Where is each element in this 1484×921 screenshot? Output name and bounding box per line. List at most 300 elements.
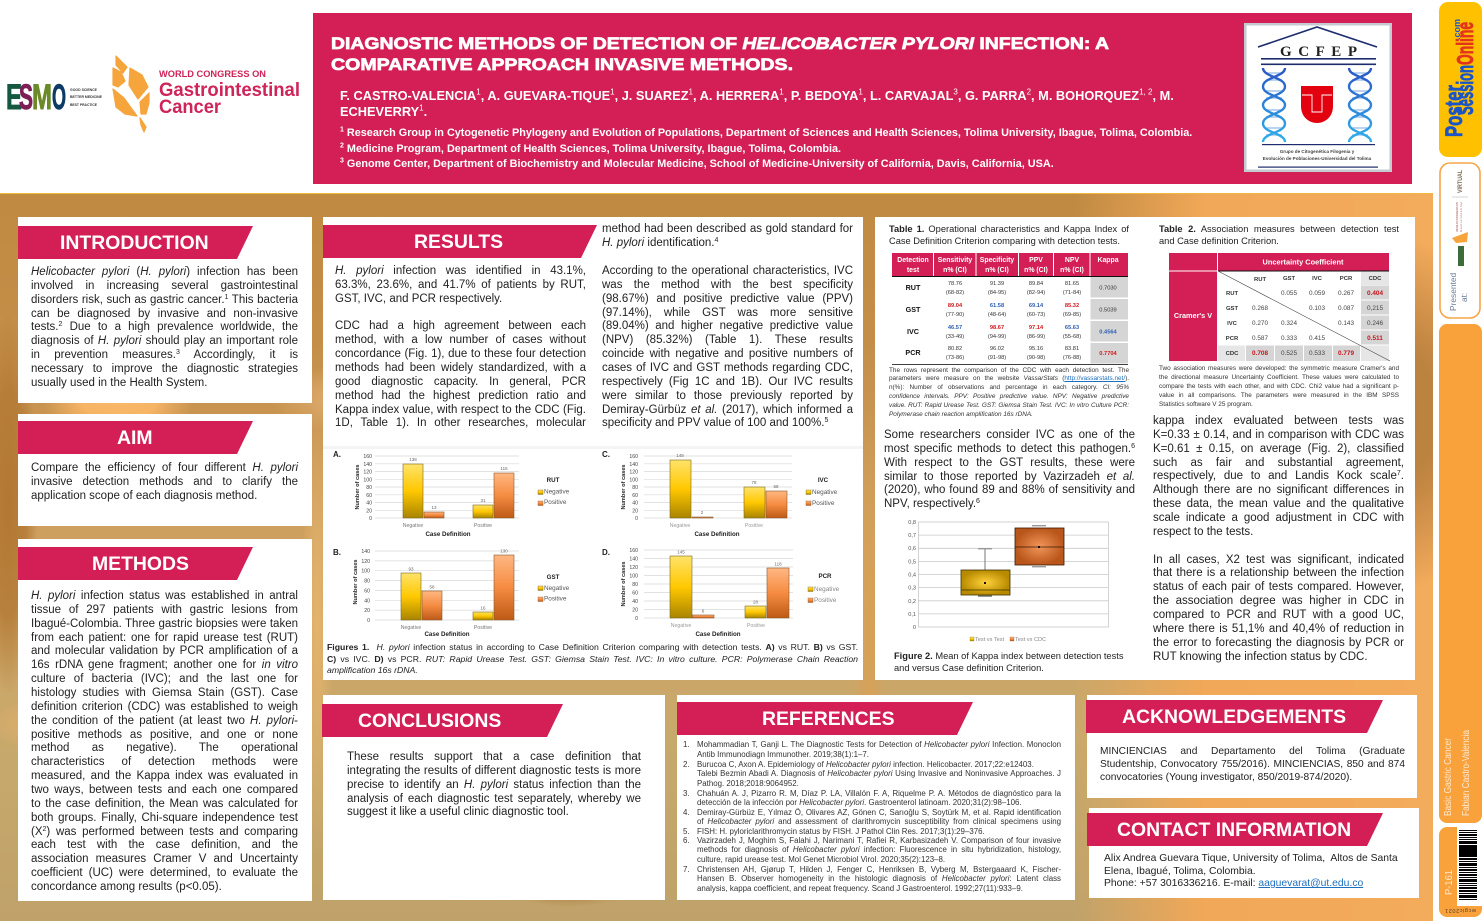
- text: discussion column 3: (2020), who found 89 and 88% of sensitivity and: [884, 484, 1135, 496]
- text: discussion column 3: Some researchers consider IVC as one of the: [884, 429, 1135, 441]
- table 1: operational characteristics: Specificity: [980, 257, 1014, 264]
- text: methods: association measures Cramer V and Uncertainty: [31, 853, 298, 865]
- caption: figures 1: Figures 1. H. pylori infection status in according to Case Definition Criterion comparing with detection tests. A) vs RUT. B) vs GST.: [327, 642, 858, 652]
- header banner: [313, 13, 1412, 184]
- note: table 1: [889, 366, 1129, 418]
- text: methods: each test with the case definition, and the: [31, 839, 298, 851]
- text: methods: [31, 590, 298, 893]
- table 1: operational characteristics: 0.7030: [1099, 286, 1117, 292]
- logo: ESMO: BETTER MEDICINE: [70, 95, 103, 99]
- heading: conclusions: CONCLUSIONS: [358, 710, 501, 732]
- text: introduction: Helicobacter pylori (H. pylori) infection has been: [31, 266, 298, 278]
- table 1: operational characteristics: 0.5039: [1099, 308, 1117, 314]
- text: references list: 3.: [683, 788, 690, 798]
- table 2: association measures: 0.708: [1252, 350, 1268, 357]
- chart C: IVC bar chart: 80: [632, 485, 638, 491]
- sidebar: poster session online badge: [1439, 2, 1482, 157]
- text: results column 2 continued: was the method with the best specificity: [602, 279, 853, 291]
- text: references list: methods for diagnosis of Helicobacter pylori infection: Fluorescence in situ hybridization, histology,: [697, 845, 1061, 854]
- table 2: association measures: 0.270: [1252, 320, 1268, 327]
- heading: methods: [18, 547, 253, 580]
- table 2: association measures: 0.246: [1367, 320, 1383, 327]
- text: acknowledgements: [1100, 746, 1405, 783]
- table 2: association measures: 0.143: [1338, 320, 1354, 327]
- affiliations: 3 Genome Center, Department of Biochemistry and Molecular Medicine, School of Medicine-University of California, Davis, California, USA.: [340, 157, 1054, 170]
- text: discussion column 4: the error to forecasting the diagnosis by PCR or: [1153, 637, 1404, 649]
- chart D: PCR bar chart: 20: [632, 608, 638, 614]
- table 2: association measures: 0.103: [1309, 305, 1325, 312]
- sidebar: poster number and barcode: wcgic2021: [1445, 907, 1477, 913]
- table 2: association measures: PCR: [1226, 336, 1239, 342]
- table 1: operational characteristics: 89.84: [1029, 281, 1043, 287]
- heading: methods: METHODS: [92, 553, 189, 575]
- chart B: GST bar chart: Negative: [544, 585, 570, 592]
- text: acknowledgements: MINCIENCIAS and Departamento del Tolima (Graduate: [1100, 746, 1405, 757]
- table 1: operational characteristics: Detection: [897, 257, 929, 264]
- chart: figure 2 box plot: [908, 520, 1108, 643]
- chart D: PCR bar chart: 6: [702, 608, 705, 614]
- panel: aim: [18, 414, 312, 526]
- logo: ESMO: GOOD SCIENCE: [70, 88, 98, 92]
- note: table 1: value. RUT: Rapid Urease Test. GST: Giemsa Stain Test. IVC: In vitro Culture PCR:: [889, 402, 1129, 409]
- text: discussion column 4: K=0.61 ± 0.15, on average (Fig. 2), classified: [1153, 443, 1404, 455]
- chart A: RUT bar chart: 115: [500, 466, 508, 471]
- sidebar: poster number and barcode: P-161: [1443, 870, 1455, 895]
- chart B: GST bar chart: B.: [333, 548, 341, 557]
- table 2: association measures: 0.511: [1367, 335, 1383, 342]
- sidebar: topic and presenter: [1439, 324, 1482, 823]
- logo: world congress wordmark: Cancer: [159, 97, 222, 118]
- text: introduction: disorders risk, such as gastric cancer.1 This bacteria: [31, 294, 298, 306]
- text: references list: 6.: [683, 836, 690, 844]
- chart C: IVC bar chart: 20: [632, 508, 638, 514]
- note: table 2: compare the tests with each other, and with CDC. Chi2 value had a significant p-: [1159, 383, 1399, 390]
- text: conclusions: integrating the results of different diagnostic tests is more: [347, 765, 641, 777]
- table 1: operational characteristics: 46.57: [948, 325, 962, 331]
- table 1: operational characteristics: (90-98): [1027, 355, 1045, 361]
- note: table 2: Statistics software V 25 program.: [1159, 401, 1253, 408]
- text: references list: of Helicobacter pylori and assessment of clarithromycin susceptibility from clinical specimens using: [697, 817, 1061, 826]
- text: results column 2 continued: were similar to those previously reported by: [602, 390, 853, 402]
- logo: ESMO: BEST PRACTICE: [70, 103, 98, 107]
- panel: references: [677, 695, 1075, 900]
- chart D: PCR bar chart: 120: [629, 565, 638, 571]
- chart: figure 2 box plot: 0,5: [908, 560, 916, 566]
- table 1: operational characteristics: 96.02: [990, 346, 1004, 352]
- text: references list: 1.: [683, 740, 690, 749]
- table 2: association measures: 0,215: [1367, 305, 1383, 312]
- chart C: IVC bar chart: 160: [629, 454, 638, 460]
- text: aim: invasive detection methods and to clarify the: [31, 476, 298, 488]
- logo: ESMO: E: [6, 78, 22, 117]
- chart: figure 2 box plot: 0,6: [908, 546, 916, 552]
- chart A: RUT bar chart: A.: [333, 450, 341, 459]
- text: methods: characteristics of detection methods were: [31, 756, 298, 768]
- text: introduction: in prevention measures.3 Accordingly, it is: [31, 349, 298, 361]
- chart A: RUT bar chart: 138: [409, 457, 417, 462]
- sidebar: poster number and barcode: [1439, 827, 1482, 917]
- heading: acknowledgements: ACKNOWLEDGEMENTS: [1122, 706, 1346, 728]
- text: results column 1: method, with a low number of cases without: [335, 334, 586, 346]
- chart: figure 2 box plot: 0,2: [908, 599, 916, 605]
- text: methods: method as negative). The operational: [31, 742, 298, 754]
- text: methods: two ways, between tests and each one compared: [31, 784, 298, 796]
- text: introduction: involved in increasing several gastrointestinal: [31, 280, 298, 292]
- text: references list: Demiray-Gürbüz E, Yılmaz Ö, Olivares AZ, Gönen C, Sarıoğlu S, Soytürk M, et al. Rapid identification: [697, 808, 1061, 816]
- text: acknowledgements: convocatories (Young investigator, 850/2019-874/2020).: [1100, 772, 1352, 783]
- table 1: operational characteristics: PCR: [905, 348, 921, 357]
- text: discussion column 4: such as fair and substantial agreement,: [1153, 457, 1404, 469]
- note: table 2: [1159, 365, 1399, 408]
- chart C: IVC bar chart: C.: [602, 450, 610, 459]
- text: results column 1: 63.3%, 23.6%, and 41.7% of patients by RUT,: [335, 279, 586, 291]
- table 1: operational characteristics: RUT: [906, 283, 921, 292]
- panel: tables and discussion: [875, 217, 1415, 680]
- text: discussion column 3: NPV, respectively.6: [884, 498, 980, 510]
- chart A: RUT bar chart: 160: [363, 454, 372, 460]
- text: conclusions: precise to identify an H. pylori status infection than the: [347, 779, 641, 791]
- authors: F. CASTRO-VALENCIA1, A. GUEVARA-TIQUE1, J. SUAREZ1, A. HERRERA1, P. BEDOYA1, L. CARVAJAL3, G. PARRA2, M. BOHORQUEZ1, 2, M. ECHEVERRY1.: [340, 88, 1174, 118]
- chart C: IVC bar chart: 2: [701, 510, 704, 515]
- table 1: operational characteristics: 95.16: [1029, 346, 1043, 352]
- note: table 1: confidence intervals. PPV: Positive predictive value. NPV: Negative predictive: [889, 393, 1129, 400]
- table 2: association measures: 0.087: [1338, 305, 1354, 312]
- table 1: operational characteristics: (71-84): [1063, 290, 1081, 296]
- text: discussion column 4: scale indicate a good adjustment in CDC with: [1153, 512, 1404, 524]
- panel: acknowledgements: [1087, 695, 1417, 798]
- caption: table 2: Table 2. Association measures between detection test: [1159, 224, 1399, 234]
- affiliations: 2 Medicine Program, Department of Health Sciences, Tolima University, Ibague, Tolima, Colombia.: [340, 142, 841, 154]
- text: references list: Christensen AH, Gjørup T, Hilden J, Fenger C, Henriksen B, Vyberg M, Bstergaaard K, Fischer-: [697, 864, 1061, 874]
- table 1: operational characteristics: NPV: [1065, 257, 1079, 264]
- text: results column 1: GST, IVC, and PCR respectively.: [335, 293, 502, 305]
- table 1: operational characteristics: n% (CI): [943, 267, 967, 274]
- text: results column 2 continued: Demiray-Gürbüz et al. (2017), which informed a: [602, 404, 853, 416]
- table 1: operational characteristics: (76-88): [1063, 355, 1081, 361]
- chart B: GST bar chart: 80: [364, 579, 370, 585]
- chart B: GST bar chart: GST: [547, 574, 560, 581]
- text: aim: application scope of each diagnosis method.: [31, 490, 257, 502]
- chart B: GST bar chart: Positive: [544, 596, 567, 602]
- caption: table 1: [889, 224, 1129, 246]
- chart D: PCR bar chart: 28: [753, 600, 758, 604]
- chart B: GST bar chart: 60: [364, 588, 370, 594]
- note: table 1: n(%): Number of observations and percentage in each category. CI: 95%: [889, 384, 1129, 391]
- table 2: association measures: 0.333: [1281, 335, 1297, 342]
- sidebar: poster session online badge: Poster: [1441, 85, 1468, 137]
- table 1: operational characteristics: (77-90): [946, 312, 964, 318]
- chart D: PCR bar chart: D.: [602, 548, 610, 557]
- chart A: RUT bar chart: 80: [366, 485, 372, 491]
- text: methods: histology studies with Giemsa Stain (GST). Case: [31, 687, 298, 699]
- table 1: operational characteristics: 65.63: [1065, 325, 1079, 331]
- chart B: GST bar chart: 140: [361, 549, 370, 555]
- text: discussion column 4: Although there are no significant differences in: [1153, 484, 1404, 496]
- text: references list: Antib Immunodiagn Immunother. 2019;38(1):1–7.: [697, 750, 869, 759]
- table 2: association measures: 0.587: [1252, 335, 1268, 342]
- logo: world congress wordmark: WORLD CONGRESS ON: [159, 69, 266, 79]
- chart A: RUT bar chart: Case Definition: [425, 531, 471, 538]
- chart D: PCR bar chart: Number of cases: [621, 561, 627, 607]
- affiliations: 1 Research Group in Cytogenetic Phylogeny and Evolution of Populations, Department of Sciences and Health Sciences, Tolima University, Ibague, Tolima, Colombia.: [340, 126, 1192, 139]
- table 2: association measures: RUT: [1226, 291, 1238, 297]
- chart A: RUT bar chart: 0: [369, 516, 372, 522]
- caption: table 2: [1159, 224, 1399, 246]
- chart: figure 2 box plot: 0: [913, 625, 916, 631]
- table 1: operational characteristics: (94-99): [988, 334, 1006, 340]
- chart C: IVC bar chart: 120: [629, 470, 638, 476]
- text: discussion column 3: most specific methods to detect this pathogen.6: [884, 443, 1135, 455]
- logo: ESMO: S: [19, 78, 33, 117]
- chart B: GST bar chart: 130: [500, 548, 508, 554]
- text: references list: [683, 740, 1061, 892]
- chart: figure 2 box plot: 0,1: [908, 612, 916, 618]
- table 1: operational characteristics: test: [907, 267, 920, 274]
- text: references list: 5.: [683, 826, 690, 836]
- text: conclusions: These results support that a case definition that: [347, 751, 641, 763]
- chart A: RUT bar chart: 20: [366, 508, 372, 514]
- figure background strip: [323, 446, 863, 449]
- table 2: association measures: GST: [1226, 306, 1238, 312]
- chart B: GST bar chart: 58: [429, 584, 435, 590]
- chart A: RUT bar chart: 40: [366, 500, 372, 506]
- text: conclusions: suggest it like a useful clinic diagnostic tool.: [347, 806, 569, 818]
- text: aim: Compare the efficiency of four different H. pylori: [31, 462, 298, 474]
- text: results column 1: 1D, Table 1). In other researches, molecular: [335, 417, 586, 429]
- chart C: IVC bar chart: IVC: [818, 477, 829, 484]
- table 1: operational characteristics: 0.4564: [1099, 330, 1118, 336]
- table 1: operational characteristics: 78.76: [948, 281, 962, 287]
- text: contact information: [1104, 853, 1398, 889]
- panel: conclusions: [323, 695, 665, 900]
- chart B: GST bar chart: Number of cases: [353, 559, 359, 605]
- sidebar: presented at badge: Presented: [1448, 272, 1458, 311]
- chart B: GST bar chart: 16: [480, 606, 486, 610]
- caption: figure 2: [894, 651, 1124, 673]
- sidebar: presented at badge: WORLD CONGRESS ON: [1455, 202, 1459, 232]
- text: acknowledgements: Studentship, Convocatory 755/2016). MINCIENCIAS, 850 and 874: [1100, 759, 1405, 770]
- text: discussion column 4: In all cases, X2 test was significant, indicated: [1153, 554, 1404, 566]
- table 1: operational characteristics: n% (CI): [985, 267, 1009, 274]
- text: aim: [31, 462, 298, 502]
- text: results column 2 continued: specificity and PPV value of 100 and 100%.5: [602, 417, 828, 429]
- text: results column 1: concordance (Fig. 1), due to these four detection: [335, 348, 586, 360]
- text: references list: 7.: [683, 864, 690, 874]
- heading: conclusions: [322, 704, 563, 737]
- table 1: operational characteristics: [892, 253, 1128, 365]
- chart C: IVC bar chart: 68: [773, 484, 779, 489]
- sidebar: presented at badge: at:: [1459, 293, 1469, 302]
- text: results column 1: good diagnostic capacity. In general, PCR: [335, 376, 586, 388]
- text: methods: measured, and the Kappa index was evaluated in: [31, 770, 298, 782]
- caption: figure 2: Figure 2. Mean of Kappa index between detection tests: [894, 651, 1123, 661]
- chart C: IVC bar chart: 0: [635, 516, 638, 522]
- text: discussion column 4: status of each pair of tests compared. However,: [1153, 581, 1404, 593]
- sidebar: presented at badge: [1440, 163, 1480, 318]
- text: introduction: [31, 266, 298, 389]
- chart C: IVC bar chart: 148: [676, 453, 684, 458]
- table 1: operational characteristics: n% (CI): [1024, 267, 1048, 274]
- table 1: operational characteristics: (60-73): [1027, 312, 1045, 318]
- sidebar: topic and presenter: Basic Gastric Cancer: [1443, 738, 1454, 816]
- chart: figure 2 box plot: 0,8: [908, 520, 916, 526]
- chart D: PCR bar chart: 118: [774, 562, 782, 566]
- chart B: GST bar chart: Positive: [474, 625, 492, 631]
- text: discussion column 4: kappa index evaluated between tests was: [1153, 415, 1404, 427]
- table 2: association measures: 0.779: [1338, 350, 1354, 357]
- title: COMPARATIVE APPROACH INVASIVE METHODS.: [331, 55, 793, 74]
- chart C: IVC bar chart: 78: [751, 480, 757, 485]
- table 2: association measures: 0.525: [1281, 350, 1297, 357]
- text: introduction: necessary to improve the diagnostic strategies: [31, 363, 298, 375]
- heading: references: [677, 702, 973, 735]
- chart B: GST bar chart: 120: [361, 559, 370, 565]
- text: references list: Mohammadian T, Ganji L. The Diagnostic Tests for Detection of Helicobacter pylori Infection. Monoclon: [697, 740, 1061, 749]
- chart D: PCR bar chart: Negative: [814, 586, 840, 593]
- text: references list: 2.: [683, 760, 690, 768]
- table 2: association measures: 0.415: [1309, 335, 1325, 342]
- table 1: operational characteristics: (33-49): [946, 334, 964, 340]
- chart D: PCR bar chart: 80: [632, 582, 638, 588]
- note: table 1: The rows represent the comparison of the CDC with each detection test. The: [889, 366, 1129, 374]
- text: references list: Pathog. 2018;2018:9064952.: [697, 778, 799, 788]
- table 1: operational characteristics: 89.04: [948, 303, 963, 309]
- text: discussion column 4: that there is a relationship between the infection: [1153, 567, 1404, 579]
- text: references list: culture, rapid urease test. Mol Genet Microbiol Virol. 2020;35(2):123–8.: [697, 854, 945, 864]
- text: methods: (X2) was performed between tests and comparing: [31, 826, 298, 838]
- chart C: IVC bar chart: Negative: [812, 489, 838, 496]
- heading: introduction: [18, 226, 253, 259]
- text: introduction: tests.2 Due to a high prevalence worldwide, the: [31, 321, 298, 333]
- chart C: IVC bar chart: Negative: [670, 523, 690, 529]
- table 2: association measures: [1169, 253, 1390, 361]
- note: table 1: parameters were measure on the website VassarStats (http://vassarstats.net/).: [889, 375, 1129, 382]
- text: references list: Talebi Bezmin Abadi A. Diagnosis of Helicobacter pylori Using Invasive and Noninvasive Approaches. J: [697, 769, 1061, 778]
- text: results column 1: H. pylori infection was identified in 43.1%,: [335, 265, 586, 277]
- text: references list: Hansen B. Observer homogeneity in the histologic diagnosis of Helicobacter pylori: Latent class: [697, 874, 1061, 883]
- text: discussion column 4: RUT knowing the infection status by CDC.: [1153, 651, 1368, 663]
- chart D: PCR bar chart: Negative: [671, 623, 691, 629]
- chart C: IVC bar chart: 60: [632, 493, 638, 499]
- chart D: PCR bar chart: 140: [629, 556, 638, 562]
- chart C: IVC bar chart: 100: [629, 477, 638, 483]
- title: [331, 34, 1109, 74]
- table 2: association measures: Cramer's V: [1174, 311, 1212, 320]
- text: discussion column 3: With respect to the GST results, these were: [884, 457, 1135, 469]
- chart D: PCR bar chart: 100: [629, 574, 638, 580]
- text: introduction: can be diagnosed by invasive and non-invasive: [31, 308, 298, 320]
- title: DIAGNOSTIC METHODS OF DETECTION OF HELICOBACTER PYLORI INFECTION: A: [331, 34, 1109, 53]
- header left: congress logos: [6, 55, 300, 133]
- table 2: association measures: Uncertainty Coefficient: [1263, 258, 1344, 266]
- text: methods: and molecular validation by PCR amplification of a: [31, 645, 298, 657]
- chart A: RUT bar chart: 31: [480, 498, 486, 503]
- table 1: operational characteristics: IVC: [907, 327, 919, 336]
- text: discussion column 4: these data, the mean value and the qualitative: [1153, 498, 1404, 510]
- table 1: operational characteristics: 98.67: [990, 325, 1004, 331]
- table 2: association measures: 0.268: [1252, 305, 1268, 312]
- text: methods: both groups. Finally, Chi-square independence test: [31, 812, 298, 824]
- heading: references: REFERENCES: [762, 708, 895, 730]
- chart C: IVC bar chart: Positive: [812, 500, 835, 507]
- chart C: IVC bar chart: Case Definition: [694, 531, 740, 538]
- note: table 2: the directional measure Uncertainty Coefficient. These values were calculated to: [1159, 374, 1399, 381]
- text: methods: concordance among results (p<0.05).: [31, 881, 222, 893]
- table 1: operational characteristics: 80.82: [948, 346, 962, 352]
- text: methods: H. pylori infection status was established in antral: [31, 590, 298, 602]
- heading: contact information: CONTACT INFORMATION: [1117, 819, 1351, 841]
- chart C: IVC bar chart: 40: [632, 500, 638, 506]
- chart B: GST bar chart: Negative: [401, 625, 421, 631]
- table 2: association measures: IVC: [1312, 276, 1323, 282]
- caption: table 1: Table 1. Operational characteristics and Kappa Index of: [889, 224, 1129, 234]
- logo: orange leaf: [113, 56, 149, 132]
- chart D: PCR bar chart: Positive: [814, 597, 837, 604]
- caption: figure 2: and versus Case definition Criterion.: [894, 663, 1044, 673]
- chart A: RUT bar chart: 140: [363, 462, 372, 468]
- text: methods: culture of bacteria (IVC); and the last one for: [31, 673, 298, 685]
- chart: figure 2 box plot: Test vs CDC: [1015, 637, 1046, 643]
- caption: figures 1: amplification 16s rDNA.: [327, 665, 418, 675]
- text: methods: coefficient (UC) were determined, to evaluate the: [31, 867, 298, 879]
- chart D: PCR bar chart: 40: [632, 599, 638, 605]
- heading: aim: [18, 421, 253, 454]
- text: conclusions: [347, 751, 641, 818]
- table 2: association measures: CDC: [1226, 351, 1239, 357]
- chart A: RUT bar chart: 13: [431, 505, 437, 510]
- text: references list: Vazirzadeh J, Moghim S, Falahi J, Narimani T, Rafiei R, Karbasizadeh V. Comparison of four invasive: [697, 836, 1061, 844]
- chart C: IVC bar chart: Positive: [745, 523, 763, 529]
- text: results column 2 continued: (98.67%) and positive predictive value (PPV): [602, 293, 853, 305]
- table 2: association measures: 0.404: [1367, 290, 1383, 297]
- chart D: PCR bar chart: 60: [632, 590, 638, 596]
- background: golden texture: [0, 193, 1433, 921]
- sidebar: poster session online badge: Session: [1452, 65, 1478, 115]
- chart D: PCR bar chart: Case Definition: [695, 631, 741, 638]
- heading: results: [323, 225, 597, 258]
- panel: introduction: [18, 217, 312, 403]
- text: references list: Burucoa C, Axon A. Epidemiology of Helicobacter pylori infection. Helicobacter. 2017;22:e12403.: [697, 760, 1034, 768]
- sidebar: poster session online badge: .com: [1452, 19, 1462, 40]
- text: results column 2 continued: coincide with negative and positive numbers of: [602, 348, 853, 360]
- logo: ESMO: [6, 78, 103, 117]
- table 1: operational characteristics: 97.14: [1029, 325, 1044, 331]
- chart D: PCR bar chart: 145: [677, 550, 685, 554]
- table 1: operational characteristics: GST: [906, 305, 921, 314]
- text: results column 1: method had the highest prediction ratio and: [335, 390, 586, 402]
- table 1: operational characteristics: Kappa: [1097, 257, 1119, 264]
- chart B: GST bar chart: 100: [361, 569, 370, 575]
- text: results column 2 continued: (NPV) (85.32%) (Table 1). These results: [602, 334, 853, 346]
- logo: GCFEP research group: Grupo de Citogenética Filogenia y: [1280, 149, 1355, 154]
- logo: GCFEP research group: GCFEP: [1280, 44, 1357, 60]
- text: discussion column 4: respect to the tests.: [1153, 526, 1253, 538]
- table 1: operational characteristics: (68-82): [946, 290, 964, 296]
- table 1: operational characteristics: (55-68): [1063, 334, 1081, 340]
- table 1: operational characteristics: (91-98): [988, 355, 1006, 361]
- text: results column 1: [335, 265, 586, 429]
- text: introduction: usually used in the Health System.: [31, 377, 207, 389]
- text: results column 1: CDC had a high agreement between each: [335, 320, 586, 332]
- chart: figure 2 box plot: 0,3: [908, 586, 916, 592]
- table 1: operational characteristics: 85.32: [1065, 303, 1079, 309]
- sidebar: topic and presenter: Fabian Castro-Valencia: [1461, 730, 1472, 816]
- text: references list: analysis, kappa coefficient, and repeat frequency. Scand J Gastroenterol. 1992;27(11):933–9.: [697, 884, 1023, 892]
- chart A: RUT bar chart: Negative: [403, 523, 423, 529]
- text: results column 2 continued: cases of IVC and GST methods regarding CDC,: [602, 362, 853, 374]
- text: results column 2 continued: (89.04%) and higher negative predictive value: [602, 320, 853, 332]
- text: discussion column 4: [1153, 415, 1404, 663]
